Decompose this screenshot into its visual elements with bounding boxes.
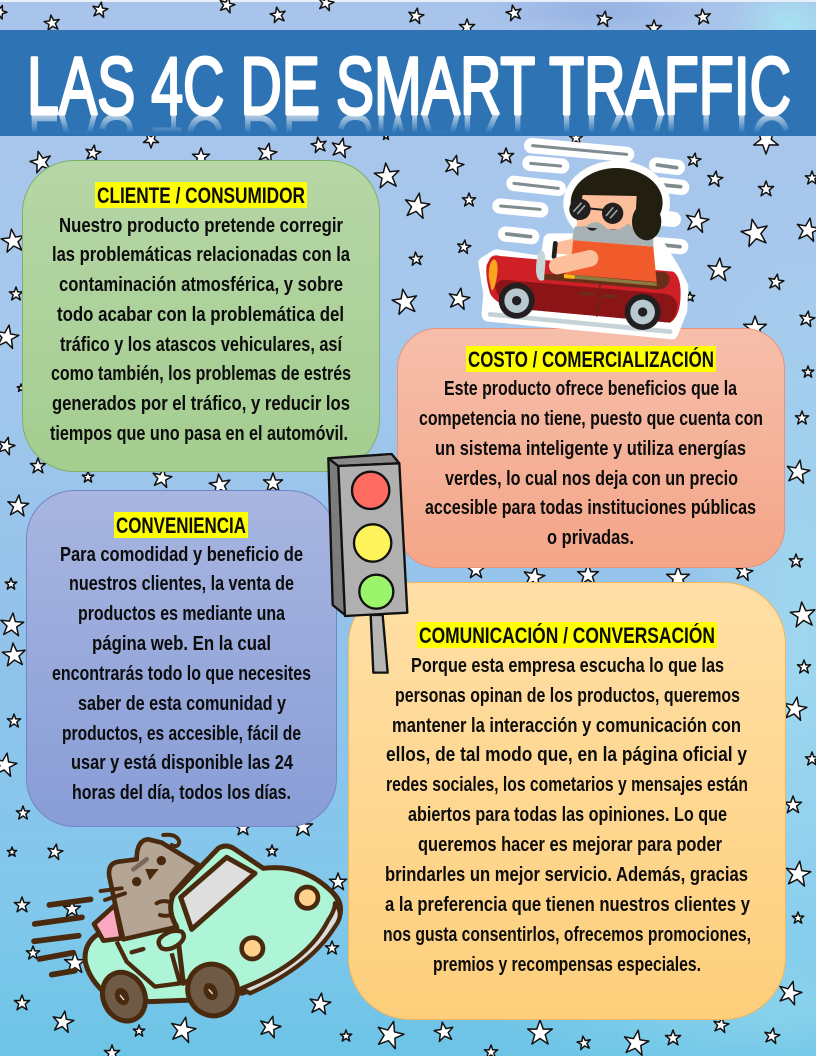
text block: conveniencia: productos es mediante una xyxy=(78,603,286,625)
text block: comunicación: abiertos para todas las opiniones. Lo que xyxy=(408,804,727,826)
text block: conveniencia: encontrarás todo lo que necesites xyxy=(52,663,311,685)
speed lines xyxy=(34,899,91,975)
text block: costo: un sistema inteligente y utiliza energías xyxy=(435,438,746,460)
wheels xyxy=(95,965,153,1028)
text block: cliente: todo acabar con la problemática del xyxy=(57,304,344,326)
text block: cliente: como también, los problemas de estrés xyxy=(51,363,351,385)
car body xyxy=(486,255,681,323)
wheels xyxy=(499,283,535,319)
pole xyxy=(371,615,388,673)
text block: cliente: tiempos que uno pasa en el automóvil. xyxy=(50,423,348,445)
text block: comunicación: premios y recompensas especiales. xyxy=(433,954,701,976)
cat xyxy=(109,839,198,939)
text block: costo: Este producto ofrece beneficios que la xyxy=(444,378,738,400)
text block: conveniencia: nuestros clientes, la venta de xyxy=(69,573,294,595)
car front xyxy=(171,846,340,993)
text block: cliente xyxy=(50,215,351,445)
panel: cliente / consumidor xyxy=(22,160,380,472)
text block: costo: verdes, lo cual nos deja con un precio xyxy=(445,468,738,490)
heading: cliente: CLIENTE / CONSUMIDOR xyxy=(97,183,305,208)
text block: comunicación: personas opinan de los productos, queremos xyxy=(395,685,740,707)
driver xyxy=(565,240,657,282)
text block: comunicación: mantener la interacción y comunicación con xyxy=(392,715,741,737)
rear body xyxy=(85,892,341,1002)
text block: conveniencia: horas del día, todos los días. xyxy=(72,782,291,804)
heading: conveniencia: CONVENIENCIA xyxy=(116,513,246,538)
text block: conveniencia: Para comodidad y beneficio de xyxy=(60,544,303,566)
text block: comunicación: a la preferencia que tienen nuestros clientes y xyxy=(385,894,751,916)
text block: conveniencia: saber de esta comunidad y xyxy=(78,693,287,715)
door xyxy=(117,942,180,987)
text block: cliente: Nuestro producto pretende corregir xyxy=(59,215,343,237)
title banner xyxy=(0,30,816,136)
text block: cliente: tráfico y los atascos vehiculares, así xyxy=(60,334,343,356)
text block: conveniencia: página web. En la cual xyxy=(92,633,271,655)
text block: costo xyxy=(419,378,763,549)
heading: comunicación: COMUNICACIÓN / CONVERSACIÓN xyxy=(419,623,715,648)
text block: comunicación xyxy=(383,655,751,976)
pink scarf xyxy=(94,905,122,941)
icon: cat driving mint car xyxy=(34,835,341,1028)
text block: cliente: las problemáticas relacionadas con la xyxy=(52,244,351,266)
lights xyxy=(352,472,389,509)
text block: comunicación: brindarles un mejor servicio. Además, gracias xyxy=(385,864,748,886)
text block: costo: o privadas. xyxy=(547,527,634,549)
icon: traffic light xyxy=(328,454,407,673)
icon: man driving red car sticker xyxy=(485,146,682,333)
sticker outline xyxy=(485,167,682,333)
text block: conveniencia: productos, es accesible, fácil de xyxy=(62,723,301,745)
text block: comunicación: queremos hacer es mejorar para poder xyxy=(418,834,722,856)
panel: costo / comercialización xyxy=(398,328,784,568)
text block: cliente: generados por el tráfico, y reducir los xyxy=(52,393,350,415)
heading: costo: COSTO / COMERCIALIZACIÓN xyxy=(468,347,714,372)
text block: conveniencia xyxy=(52,544,311,804)
text block: cliente: contaminación atmosférica, y sobre xyxy=(59,274,343,296)
panel: conveniencia xyxy=(26,490,336,826)
text block: comunicación: ellos, de tal modo que, en la página oficial y xyxy=(386,744,748,766)
panel: comunicación / conversación xyxy=(348,582,786,1020)
text block: comunicación: Porque esta empresa escucha lo que las xyxy=(411,655,724,677)
text block: conveniencia: usar y está disponible las 24 xyxy=(71,752,294,774)
